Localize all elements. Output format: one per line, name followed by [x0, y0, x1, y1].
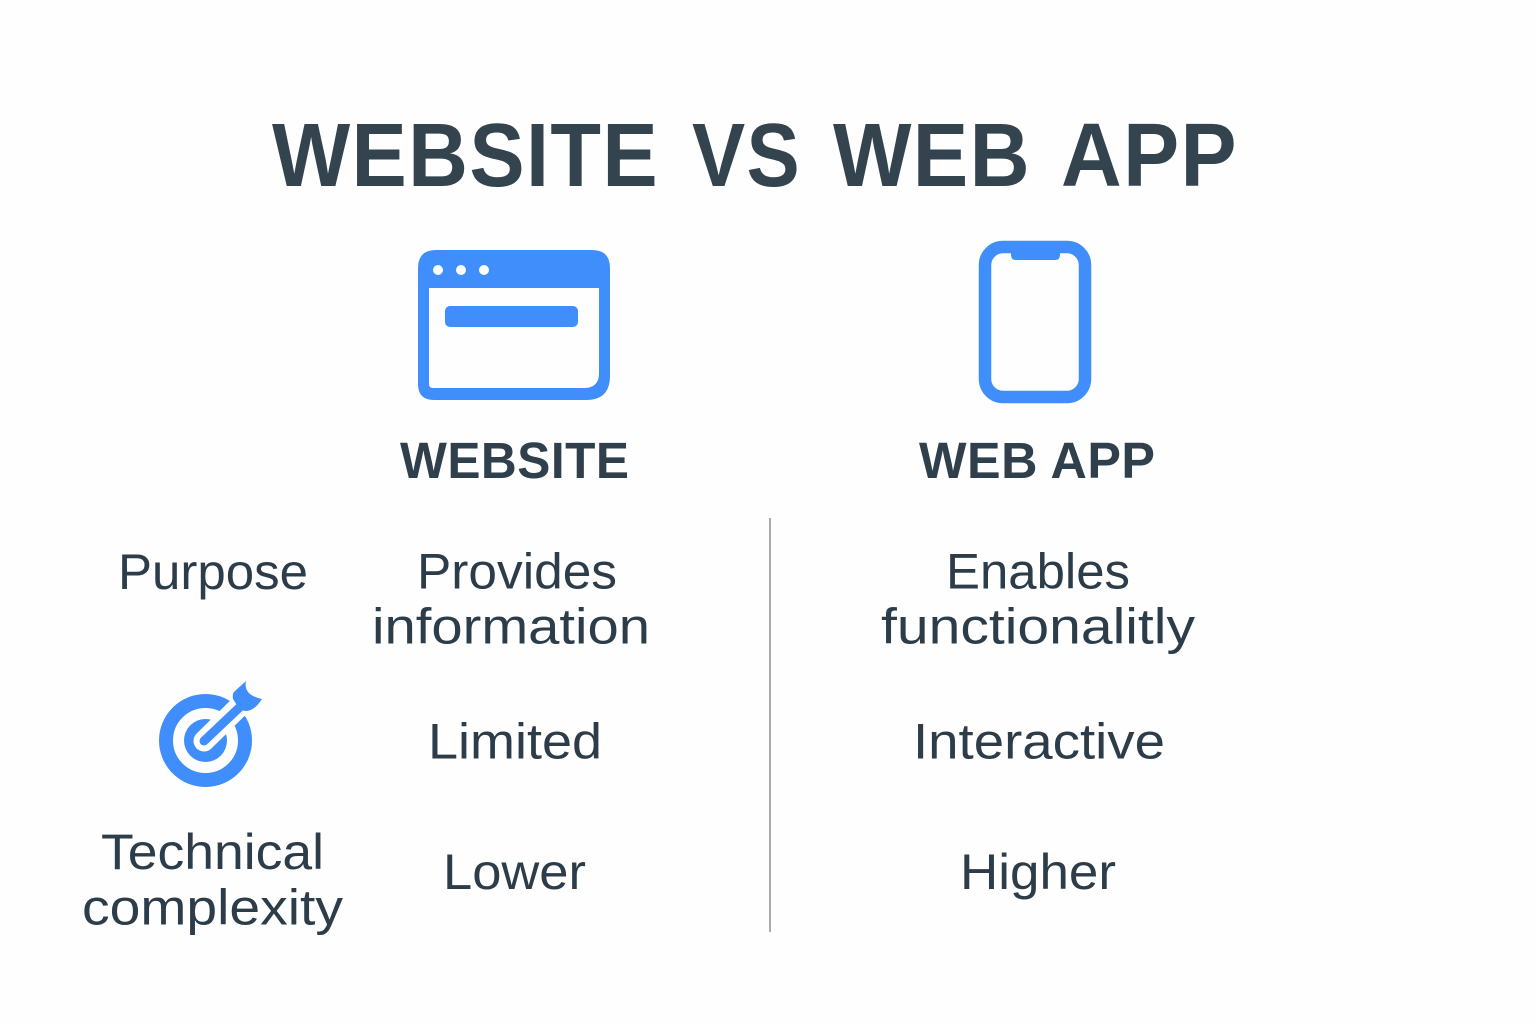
title: WEB [833, 106, 1031, 206]
center divider [769, 518, 771, 932]
row label: technical complexity: complexity [82, 880, 343, 936]
heading: website: WEBSITE [400, 432, 630, 489]
website interactivity: Limited [428, 714, 602, 770]
title: WEBSITE [272, 106, 659, 206]
website complexity: Lower [443, 844, 586, 900]
icon: phone [985, 247, 1085, 397]
icon: browser window [418, 250, 610, 400]
website purpose: information [372, 598, 650, 654]
row label: technical complexity: Technical [101, 824, 324, 880]
website purpose [372, 544, 650, 654]
row label: purpose: Purpose [118, 544, 308, 600]
row label: technical complexity [82, 824, 343, 936]
web app purpose [881, 544, 1195, 654]
icon: target with arrow [166, 681, 262, 780]
web app interactivity: Interactive [913, 714, 1165, 770]
web app purpose: Enables [946, 544, 1130, 600]
heading: web app: WEB APP [919, 432, 1156, 489]
website purpose: Provides [417, 544, 617, 600]
title: VS [692, 106, 801, 206]
title: APP [1061, 106, 1238, 206]
web app purpose: functionalitly [881, 598, 1195, 654]
web app complexity: Higher [960, 844, 1116, 900]
